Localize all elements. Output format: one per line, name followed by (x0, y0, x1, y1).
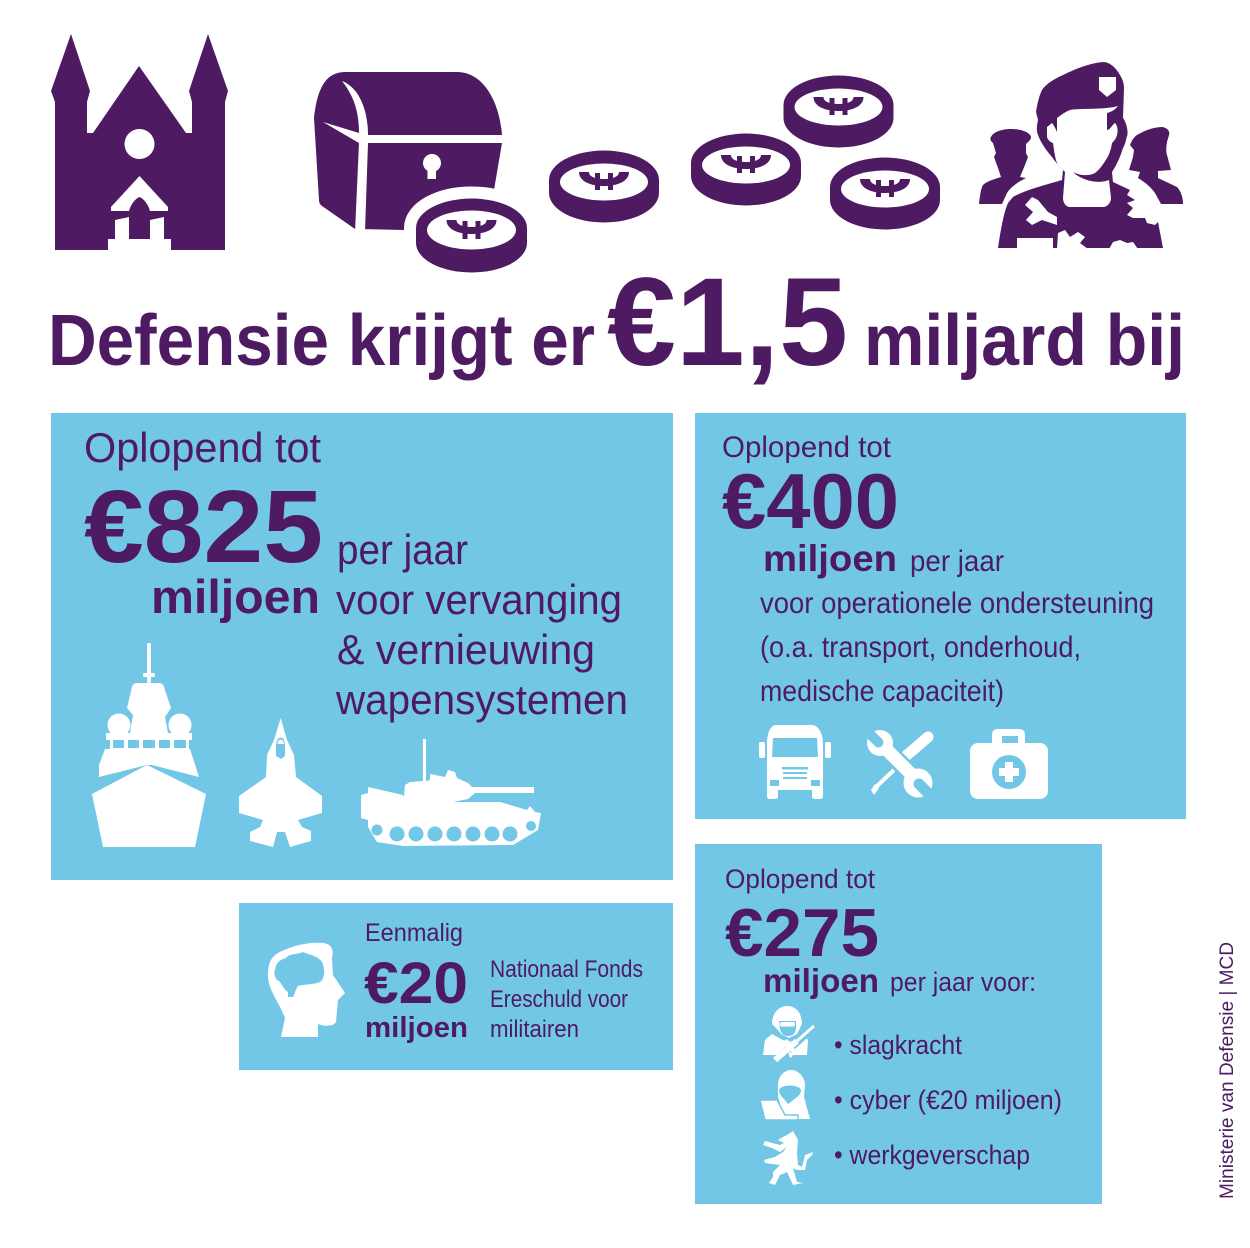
description (335, 526, 628, 723)
icon: heraldic lion (763, 1131, 813, 1185)
bullet list: • werkgeverschap (834, 1140, 1030, 1170)
bullet list: • slagkracht (834, 1030, 962, 1060)
icon: truck (759, 725, 831, 799)
panel: 20 miljoen (239, 903, 673, 1070)
icon: coin 1 (549, 151, 659, 222)
description: medische capaciteit) (760, 675, 1004, 708)
icon: first aid kit (970, 729, 1048, 799)
icon: church (51, 34, 228, 250)
heading: oplopend tot: Oplopend tot (84, 424, 321, 471)
amount unit: miljoen (763, 538, 897, 579)
description: per jaar (910, 545, 1004, 578)
title: Defensie krijgt er (48, 301, 595, 381)
icon: hacker with laptop (760, 1070, 810, 1120)
amount unit: miljoen (365, 1012, 468, 1044)
amount: 825: €825 (84, 469, 323, 584)
panel: 275 miljoen (695, 844, 1102, 1204)
icon: coin 4 (830, 158, 940, 229)
amount unit: miljoen (151, 570, 320, 623)
heading: oplopend tot: Oplopend tot (722, 431, 892, 464)
title: €1,5 (607, 253, 848, 392)
title: miljard bij (864, 301, 1185, 381)
description: militairen (490, 1016, 579, 1043)
heading: eenmalig: Eenmalig (365, 919, 463, 947)
description: & vernieuwing (337, 626, 595, 673)
amount unit: miljoen (763, 962, 879, 999)
description (760, 545, 1154, 708)
icon: soldiers with beret (979, 62, 1183, 249)
description: voor operationele ondersteuning (760, 587, 1154, 620)
description: wapensystemen (335, 676, 628, 723)
description: (o.a. transport, onderhoud, (760, 631, 1081, 664)
credit: Ministerie van Defensie | MCD (1217, 942, 1238, 1199)
amount: 400: €400 (722, 457, 899, 545)
description (490, 956, 643, 1043)
icon: ship (92, 643, 206, 847)
bullet list: • cyber (€20 miljoen) (834, 1085, 1062, 1115)
icon: tank (361, 739, 541, 846)
icon: coin 2 (691, 134, 801, 205)
icon: coin 3 (784, 76, 894, 147)
panel: 825 miljoen (51, 413, 673, 880)
icon: treasure chest with coin (314, 72, 527, 272)
title (48, 253, 1185, 392)
description: Ereschuld voor (490, 986, 628, 1013)
description: Nationaal Fonds (490, 956, 643, 983)
bullet list (834, 1030, 1062, 1170)
icon: head with brain (268, 943, 345, 1037)
icon: armed soldier (763, 1006, 818, 1065)
icon: wrench and screwdriver (861, 725, 937, 802)
panel: 400 miljoen (695, 413, 1186, 819)
amount: 275: €275 (725, 895, 879, 971)
icon: fighter jet (239, 718, 322, 847)
amount: 20: €20 (364, 951, 468, 1016)
subheading: per jaar voor: (890, 967, 1036, 997)
description: per jaar (337, 526, 468, 573)
heading: oplopend tot: Oplopend tot (725, 864, 875, 894)
description: voor vervanging (336, 576, 622, 623)
